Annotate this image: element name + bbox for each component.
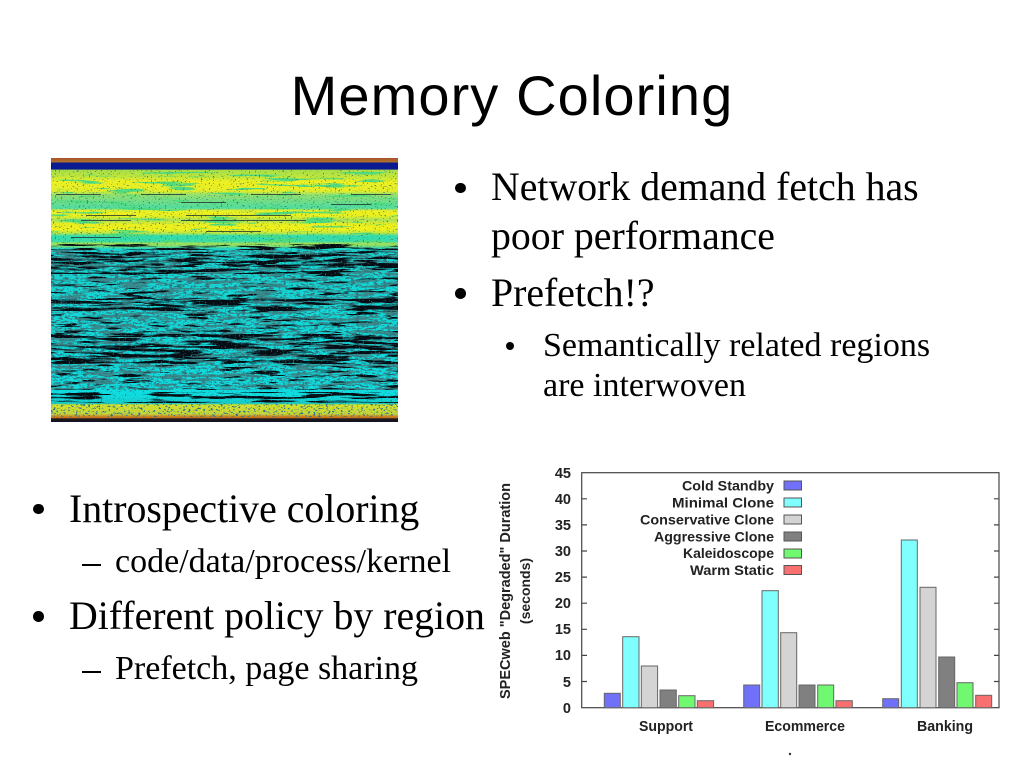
y axis tick labels: 10 (555, 648, 571, 664)
legend: Conservative Clone (640, 512, 774, 528)
x axis category labels: Banking (917, 719, 973, 735)
y axis tick labels: 5 (563, 675, 571, 691)
legend: Minimal Clone (672, 494, 774, 510)
thin dark streaks in the yellow band (56, 194, 391, 238)
bullet list: bottom left (33, 487, 485, 687)
y axis tick labels: 30 (555, 544, 571, 560)
bullet marker (455, 183, 466, 193)
stray dot (789, 753, 791, 755)
x axis category labels: Support (639, 719, 693, 735)
legend: Cold Standby (682, 478, 774, 494)
bars: support (604, 637, 714, 708)
bars: ecommerce (744, 591, 852, 708)
plot frame and ticks (582, 473, 999, 708)
bullet marker (33, 611, 44, 622)
y axis tick labels: 35 (555, 518, 571, 534)
bullet: network demand fetch (491, 165, 919, 258)
sub-bullet: semantically related regions: are interwoven (543, 367, 746, 404)
legend: Aggressive Clone (654, 528, 774, 544)
y axis tick labels: 40 (555, 492, 571, 508)
bullet: network demand fetch: poor performance (491, 214, 775, 258)
sub-bullet dash (82, 564, 101, 566)
bullet: different policy by region: Different policy by region (69, 594, 485, 638)
x axis category labels: Ecommerce (765, 719, 845, 735)
sub-bullet marker (506, 342, 514, 350)
y axis tick labels: 45 (555, 466, 571, 482)
sub-bullet: prefetch, page sharing: Prefetch, page sharing (115, 650, 418, 687)
bullet: introspective coloring: Introspective coloring (69, 487, 419, 531)
sub-bullet: semantically related regions: Semantically related regions (543, 327, 930, 364)
sub-bullet dash (82, 671, 101, 673)
legend (640, 478, 802, 578)
x axis category labels (639, 719, 973, 735)
memory access heat map image (51, 158, 398, 422)
y axis tick labels (555, 466, 571, 717)
y axis tick labels: 15 (555, 622, 571, 638)
sub-bullet: semantically related regions (543, 327, 930, 404)
bars: banking (883, 540, 992, 708)
bullet: prefetch: Prefetch!? (491, 271, 655, 315)
title: Memory Coloring (291, 64, 733, 127)
bullet list: top right (455, 165, 930, 404)
y axis title (498, 483, 533, 699)
y axis tick labels: 0 (563, 701, 571, 717)
y axis tick labels: 20 (555, 596, 571, 612)
y axis title: (seconds) (517, 558, 533, 624)
bullet marker (455, 288, 466, 299)
sub-bullet: code/data/process/kernel: code/data/process/kernel (115, 543, 451, 580)
bullet marker (33, 504, 44, 514)
legend: Kaleidoscope (683, 545, 774, 561)
y axis tick labels: 25 (555, 570, 571, 586)
y axis title: SPECweb "Degraded" Duration (498, 483, 514, 699)
legend: Warm Static (690, 562, 774, 578)
bullet: network demand fetch: Network demand fetch has (491, 165, 919, 209)
